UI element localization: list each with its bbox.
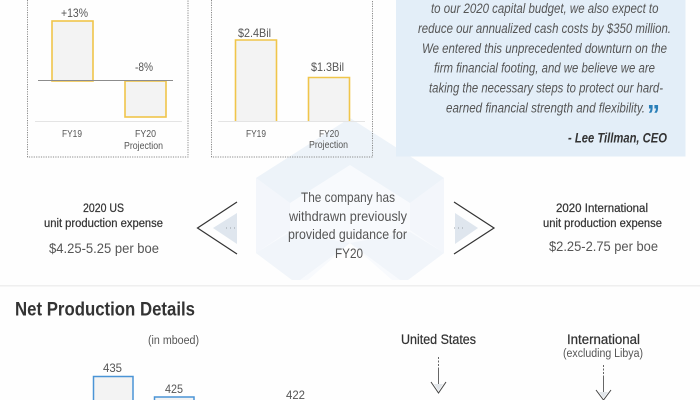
center guidance text: [288, 189, 407, 261]
panel: left bar chart, growth: FY20: [135, 128, 156, 140]
International heading: [563, 332, 643, 360]
center guidance text: provided guidance for: [288, 226, 407, 242]
arrow: left chevron: [198, 202, 238, 254]
icon: closing quotation mark: ”: [647, 99, 660, 130]
center guidance text: The company has: [301, 189, 395, 205]
heading: Net Production Details: Net Production Details: [15, 300, 195, 320]
panel: right bar chart, dollars: $1.3Bil: [311, 60, 344, 74]
quote attribution: - Lee Tillman, CEO: [568, 130, 667, 146]
US unit production expense: [44, 203, 163, 256]
panel: left bar chart, growth: Projection: [124, 140, 163, 152]
International unit production expense: $2.25-2.75 per boe: [549, 238, 658, 254]
production bar chart: 425: [165, 382, 183, 396]
panel: left bar chart, growth: FY19: [62, 128, 82, 140]
unit note: (in mboed): [148, 335, 199, 347]
panel: right bar chart, dollars: FY20: [319, 128, 339, 140]
bar: FY19 +13%: [52, 21, 93, 81]
panel: CEO quote: firm financial footing, and we believe we are: [434, 60, 655, 76]
panel: right bar chart, dollars: [212, 0, 372, 157]
background hexagon watermark: [256, 118, 444, 280]
International heading: (excluding Libya): [563, 348, 643, 360]
bar: 425: [154, 397, 194, 400]
panel: left bar chart, growth: +13%: [61, 6, 88, 20]
panel: right bar chart, dollars: $2.4Bil: [238, 26, 271, 40]
panel: CEO quote: earned financial strength and flexibility.: [446, 100, 645, 116]
International unit production expense: 2020 International: [556, 203, 648, 215]
center guidance text: withdrawn previously: [288, 208, 407, 224]
International unit production expense: unit production expense: [543, 218, 662, 230]
US unit production expense: $4.25-5.25 per boe: [49, 240, 159, 256]
bar: FY20 -8%: [125, 81, 166, 117]
panel: right bar chart, dollars: FY19: [246, 128, 266, 140]
bar: 435: [94, 376, 133, 400]
production bar chart: 435: [103, 361, 122, 375]
panel: left bar chart, growth: [28, 0, 188, 157]
panel: CEO quote: taking the necessary steps to protect our hard-: [429, 80, 663, 96]
US unit production expense: unit production expense: [44, 218, 163, 230]
panel: right bar chart, dollars: Projection: [309, 139, 348, 151]
production bar chart: [94, 361, 305, 400]
United States heading: United States: [401, 332, 476, 347]
panel: CEO quote: to our 2020 capital budget, we also expect to: [431, 1, 659, 16]
panel: left bar chart, growth: -8%: [135, 60, 153, 74]
US unit production expense: 2020 US: [83, 203, 124, 215]
International unit production expense: [543, 203, 662, 254]
panel: CEO quote: [396, 0, 686, 156]
International heading: International: [567, 332, 640, 347]
bar: FY20 $1.3Bil: [308, 78, 350, 121]
center guidance text: FY20: [335, 245, 363, 261]
arrow: International: [596, 365, 611, 400]
bar: FY19 $2.4Bil: [236, 40, 276, 121]
arrow: United States: [431, 357, 446, 393]
arrow: right chevron: [454, 202, 494, 254]
